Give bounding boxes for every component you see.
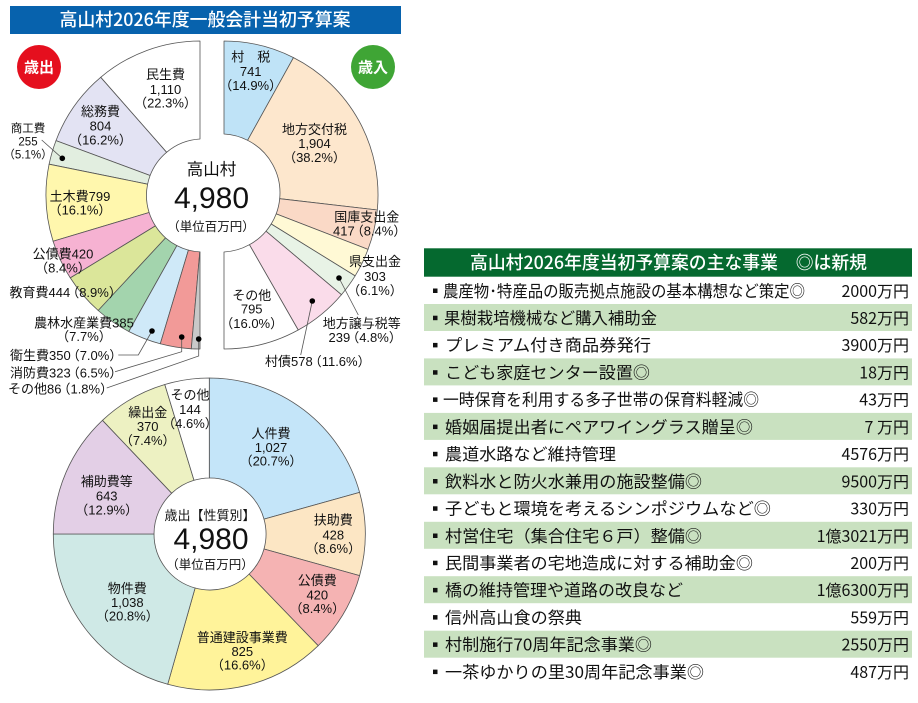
sector: other	[224, 245, 298, 349]
row text: プレミアム付き商品券発行	[445, 332, 651, 356]
sector: transfers	[102, 384, 194, 493]
row amounts: 18万円	[859, 360, 909, 384]
sector: debt service	[249, 549, 360, 646]
labels: revenue: （14.9%）	[219, 78, 282, 93]
sector: public debt	[53, 212, 155, 278]
sector: subsidies	[53, 420, 172, 534]
table header: 高山村2026年度当初予算案の主な事業 ◎は新規	[470, 249, 867, 275]
leader lines: expenditure	[42, 140, 202, 388]
center total: by nature: 歳出【性質別】	[164, 508, 256, 523]
labels: expenditure: その他86（1.8%）	[8, 382, 113, 396]
labels: revenue: （16.0%）	[220, 316, 283, 331]
row amounts: 487万円	[850, 659, 909, 683]
labels: revenue: （6.1%）	[347, 283, 403, 298]
row amounts: 2000万円	[841, 278, 909, 302]
labels: expenditure: （7.7%）	[56, 329, 112, 344]
title banner: budget	[10, 6, 401, 34]
sector: commerce	[49, 141, 150, 184]
labels: donut: 普通建設事業費	[197, 630, 288, 645]
labels: donut: （12.9%）	[75, 502, 138, 518]
center total: Takayama village	[167, 160, 255, 234]
labels: revenue: 1,904	[298, 136, 331, 151]
row bullets	[433, 288, 438, 674]
row amounts: 7 万円	[865, 414, 909, 438]
row amounts	[817, 278, 909, 683]
sector: agriculture	[98, 238, 177, 332]
labels: donut: （20.8%）	[96, 608, 159, 624]
center total: Takayama village: 4,980	[174, 182, 249, 215]
labels: expenditure: 民生費	[146, 67, 185, 82]
labels: donut: 1,027	[255, 440, 287, 455]
sector: civil engineering	[46, 164, 149, 241]
row amounts: 9500万円	[841, 468, 909, 492]
row text: 一茶ゆかりの里30周年記念事業◎	[445, 659, 704, 683]
row amounts: 1億6300万円	[817, 577, 909, 601]
sector: general affairs	[56, 77, 167, 176]
row amounts: 2550万円	[841, 632, 909, 656]
row amounts: 4576万円	[841, 441, 909, 465]
row amounts: 3900万円	[841, 332, 909, 356]
labels: revenue: 地方譲与税等	[323, 316, 401, 331]
labels: donut: 繰出金	[128, 405, 167, 420]
labels: donut: （7.4%）	[120, 433, 176, 448]
labels: revenue: その他	[232, 288, 271, 303]
labels: expenditure: 総務費	[81, 104, 120, 119]
table: main projects	[424, 248, 912, 683]
labels: expenditure: 商工費	[11, 121, 45, 135]
labels: donut: 144	[179, 402, 201, 417]
labels: revenue: 303	[364, 269, 386, 284]
sector: local allocation tax	[248, 58, 378, 210]
row text: 農産物･特産品の販売拠点施設の基本構想など策定◎	[443, 278, 805, 302]
labels: revenue: 地方交付税	[282, 122, 347, 137]
sector: fire	[160, 250, 200, 349]
labels: revenue: （38.2%）	[283, 150, 346, 165]
labels: expenditure: （22.3%）	[134, 96, 197, 110]
sector: welfare	[101, 41, 200, 152]
labels: expenditure: 土木費799	[50, 189, 110, 204]
leader lines: revenue	[301, 275, 358, 355]
labels: donut: （20.7%）	[240, 454, 302, 468]
labels: revenue: 村債578（11.6%）	[265, 354, 371, 369]
labels: donut: （8.6%）	[305, 541, 361, 556]
labels: donut: （16.6%）	[211, 658, 274, 672]
labels: donut: 428	[322, 528, 344, 542]
sector: other	[165, 378, 209, 480]
sector: assistance	[264, 492, 365, 576]
sector: sanitation	[129, 246, 188, 344]
labels: donut: （8.4%）	[289, 601, 345, 616]
row amounts: 330万円	[850, 496, 909, 520]
badge: expenditure: 歳出	[24, 60, 54, 76]
badge: revenue	[351, 45, 395, 89]
labels: donut: 643	[96, 488, 118, 504]
sector: construction	[168, 574, 318, 690]
center total: by nature: 4,980	[173, 523, 249, 556]
labels: revenue: 県支出金	[349, 254, 401, 269]
labels: revenue: 村 税	[231, 50, 270, 64]
row text: 一時保育を利用する多子世帯の保育料軽減◎	[443, 387, 759, 411]
labels: donut: その他	[170, 388, 210, 402]
row amounts: 559万円	[850, 604, 909, 628]
row text: こども家庭センター設置◎	[445, 360, 650, 384]
row text: 橋の維持管理や道路の改良など	[445, 577, 683, 601]
badge: expenditure	[17, 45, 61, 89]
labels: donut: 物件費	[108, 581, 147, 596]
labels: revenue: 417（8.4%）	[333, 224, 406, 238]
sector: goods	[53, 534, 195, 684]
sector: local transfer tax	[266, 224, 355, 295]
labels: donut: 825	[231, 644, 253, 659]
chart: revenue half pie	[224, 41, 378, 349]
center total: by nature	[164, 508, 256, 572]
row bands	[424, 304, 912, 658]
labels: expenditure: （5.1%）	[3, 148, 53, 162]
labels: expenditure: 255	[18, 136, 38, 148]
row text: 農道水路など維持管理	[445, 441, 616, 465]
labels: expenditure: （8.4%）	[35, 260, 91, 276]
center total: by nature: （単位百万円）	[166, 558, 254, 572]
row text: 飲料水と防火水兼用の施設整備◎	[445, 468, 702, 492]
labels: revenue: 239（4.8%）	[328, 330, 402, 345]
sector: personnel	[209, 378, 360, 519]
labels: expenditure: 公債費420	[33, 246, 93, 262]
center total: Takayama village: 高山村	[187, 160, 236, 179]
labels: donut: 補助費等	[81, 474, 133, 489]
row amounts: 200万円	[850, 550, 909, 574]
labels: donut: 1,038	[111, 595, 144, 610]
row text: 民間事業者の宅地造成に対する補助金◎	[445, 550, 753, 574]
center total: Takayama village: （単位百万円）	[167, 220, 255, 234]
labels: donut: 420	[306, 588, 328, 602]
labels: revenue: 795	[241, 302, 263, 316]
labels: revenue: 国庫支出金	[334, 210, 399, 224]
labels: donut: 扶助費	[314, 512, 353, 528]
labels: expenditure: （16.2%）	[69, 132, 132, 148]
row text	[443, 278, 805, 683]
sector: national treasury	[276, 199, 377, 249]
labels: donut	[75, 388, 361, 672]
row text: 村営住宅（集合住宅６戸）整備◎	[445, 523, 702, 547]
row text: 婚姻届提出者にペアワイングラス贈呈◎	[445, 414, 753, 438]
sector: education	[70, 226, 166, 310]
title banner: budget: 高山村2026年度一般会計当初予算案	[60, 6, 350, 32]
labels: expenditure: 衛生費350（7.0%）	[10, 348, 122, 363]
sector: village bonds	[249, 231, 341, 330]
row amounts: 43万円	[859, 387, 909, 411]
row text: 子どもと環境を考えるシンポジウムなど◎	[445, 496, 771, 520]
sector: prefectural	[271, 214, 368, 276]
row amounts: 582万円	[850, 305, 909, 329]
labels: donut: 人件費	[251, 426, 291, 441]
chart: expenditure by nature donut	[53, 378, 365, 690]
labels: donut: 公債費	[298, 573, 337, 588]
labels: expenditure: 1,110	[150, 82, 181, 97]
labels: donut: （4.6%）	[162, 416, 218, 431]
labels: expenditure: 教育費444（8.9%）	[10, 285, 122, 300]
labels: donut: 370	[137, 419, 159, 434]
sector: other	[191, 252, 200, 349]
row text: 信州高山食の祭典	[445, 604, 582, 628]
labels: expenditure: 消防費323（6.5%）	[10, 366, 122, 380]
chart: expenditure half pie	[46, 41, 200, 349]
labels: expenditure	[3, 67, 197, 396]
sector: village tax	[224, 41, 294, 140]
row amounts: 1億3021万円	[817, 523, 909, 547]
labels: expenditure: 農林水産業費385	[34, 316, 134, 330]
labels: expenditure: （16.1%）	[49, 202, 111, 218]
row text: 村制施行70周年記念事業◎	[445, 632, 652, 656]
labels: revenue: 741	[240, 64, 262, 79]
labels: expenditure: 804	[90, 118, 111, 134]
row text: 果樹栽培機械など購入補助金	[444, 305, 657, 329]
badge: revenue: 歳入	[358, 60, 388, 76]
labels: revenue	[219, 50, 406, 369]
